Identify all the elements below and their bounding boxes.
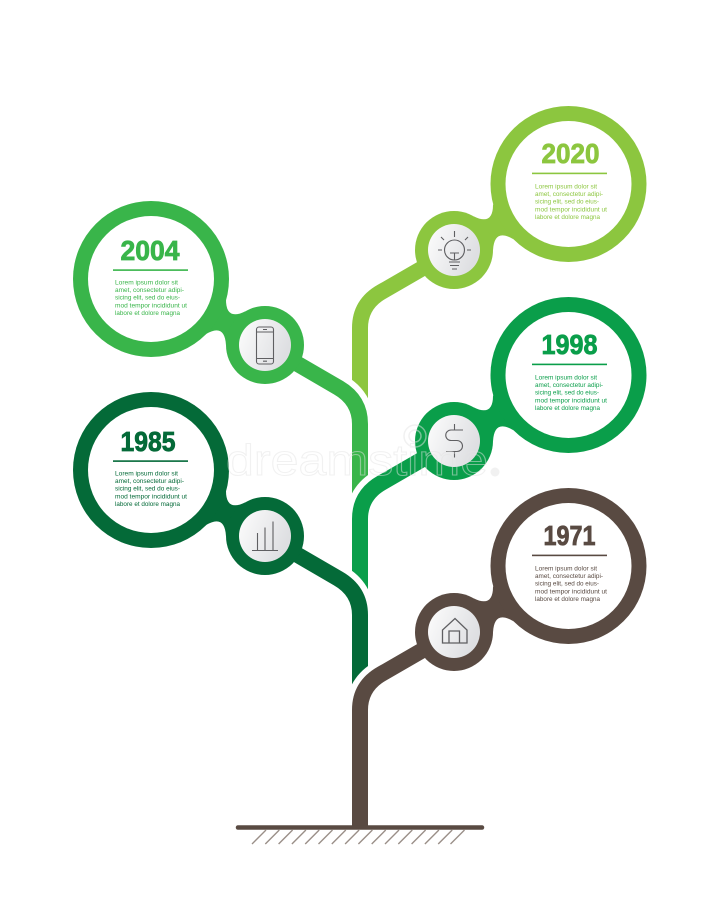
text: 2004 description: mod tempor incididunt ut [115,302,187,309]
text: 1998 description: labore et dolore magna [535,405,600,412]
text: 2004 description [115,280,187,317]
year: 1998: 1998 [542,329,598,360]
text: 1998 description: Lorem ipsum dolor sit [535,374,597,382]
watermark [226,425,500,485]
icon: bar chart [252,522,278,550]
icon: light bulb [438,231,471,269]
text: 2004 description: Lorem ipsum dolor sit [115,280,178,286]
node: 1985 [73,392,304,575]
text: 1985 description: Lorem ipsum dolor sit [115,470,178,478]
node: 1971 [415,488,646,671]
text: 2020 description: sicing elit, sed do eius- [535,199,599,206]
year: 2004: 2004 [120,235,180,266]
node: 1998 [415,297,646,480]
branch: 1985 stem [265,536,360,695]
icon: house [442,618,467,643]
year: 1985: 1985 [120,426,176,457]
ground hatching [252,830,464,844]
watermark: dreamstime [226,436,488,485]
text: 1971 description [535,566,607,603]
text: 1971 description: mod tempor incididunt ut [535,588,607,595]
text: 2020 description: amet, consectetur adipi- [535,191,603,198]
branch: 1971 trunk [360,632,454,827]
year: 1971: 1971 [544,520,596,551]
text: 2004 description: sicing elit, sed do eius- [115,295,180,302]
node: 2004 [73,201,304,384]
text: 1998 description [535,374,607,412]
text: 1971 description: amet, consectetur adipi- [535,573,603,580]
text: 2004 description: amet, consectetur adipi- [115,287,184,294]
icon: phone [256,327,274,364]
text: 1985 description: labore et dolore magna [115,501,180,508]
icon: dollar [446,424,463,458]
text: 2020 description: Lorem ipsum dolor sit [535,184,597,190]
text: 1998 description: mod tempor incididunt ut [535,397,607,404]
year: 2020: 2020 [542,138,600,169]
text: 1998 description: amet, consectetur adipi- [535,382,603,389]
text: 1971 description: Lorem ipsum dolor sit [535,566,597,572]
text: 1985 description: amet, consectetur adipi- [115,478,184,485]
text: 1971 description: sicing elit, sed do eius- [535,581,599,588]
text: 1971 description: labore et dolore magna [535,596,600,603]
text: 1985 description: mod tempor incididunt ut [115,493,187,500]
text: 2004 description: labore et dolore magna [115,310,180,317]
text: 2020 description: labore et dolore magna [535,214,600,221]
text: 1998 description: sicing elit, sed do eius- [535,390,599,397]
text: 1985 description: sicing elit, sed do eius- [115,486,180,493]
branch: 2004 stem [265,345,360,500]
branch: 2020 stem [360,250,454,410]
text: 2020 description [535,184,607,221]
text: 1985 description [115,470,187,508]
text: 2020 description: mod tempor incididunt ut [535,206,607,213]
ground line [238,825,482,830]
node: 2020 [415,106,646,289]
branch: 1998 stem [360,441,454,600]
